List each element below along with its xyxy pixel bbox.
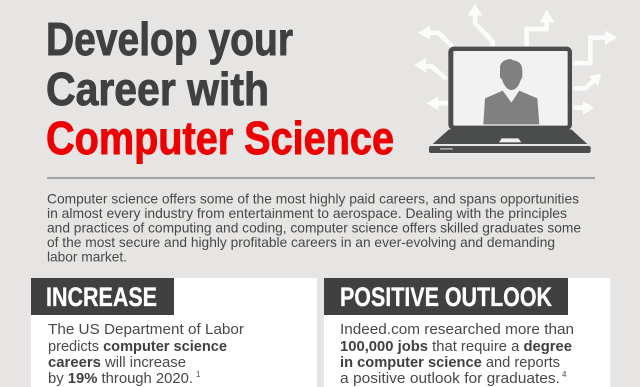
icon: outgoing arrows: [414, 3, 617, 115]
icon: user silhouette: [483, 59, 539, 124]
title: Develop your: [46, 13, 293, 65]
text block: positive outlook: 4: [562, 370, 567, 379]
heading: positive outlook: POSITIVE OUTLOOK: [340, 282, 552, 312]
panel: increase: [31, 278, 317, 387]
heading: increase: INCREASE: [46, 282, 157, 312]
intro text: and practices of computing and coding, computer science offers skilled graduates some: [47, 220, 581, 236]
text block: positive outlook: in computer science and reports: [340, 354, 560, 371]
intro text: in almost every industry from entertainment to aerospace. Dealing with the principles: [47, 205, 567, 221]
text block: increase: The US Department of Labor: [48, 321, 244, 338]
icon: laptop: [429, 47, 591, 153]
intro text: of the most secure and highly profitable careers in an ever-evolving and demanding: [47, 234, 555, 250]
title: [46, 13, 394, 164]
title: Computer Science: [46, 112, 394, 164]
text block: positive outlook: [340, 321, 574, 387]
text block: positive outlook: 100,000 jobs that require a degree: [340, 338, 572, 355]
text block: increase: 1: [196, 370, 201, 379]
heading: increase: [31, 278, 174, 315]
text block: positive outlook: a positive outlook for graduates.: [340, 370, 560, 387]
text block: increase: careers will increase: [48, 354, 186, 371]
text block: increase: by 19% through 2020.: [48, 370, 193, 387]
title: Career with: [46, 63, 269, 115]
text block: increase: [48, 321, 244, 387]
heading: positive outlook: [324, 278, 568, 315]
panel: positive outlook: [324, 278, 610, 387]
intro text: Computer science offers some of the most highly paid careers, and spans opportunities: [47, 190, 579, 206]
icon: laptop with user and outgoing arrows: [414, 3, 617, 153]
intro text: [47, 190, 581, 264]
divider rule: [47, 177, 595, 179]
text block: positive outlook: Indeed.com researched more than: [340, 321, 574, 338]
text block: increase: predicts computer science: [48, 338, 227, 355]
intro text: labor market.: [47, 248, 127, 264]
